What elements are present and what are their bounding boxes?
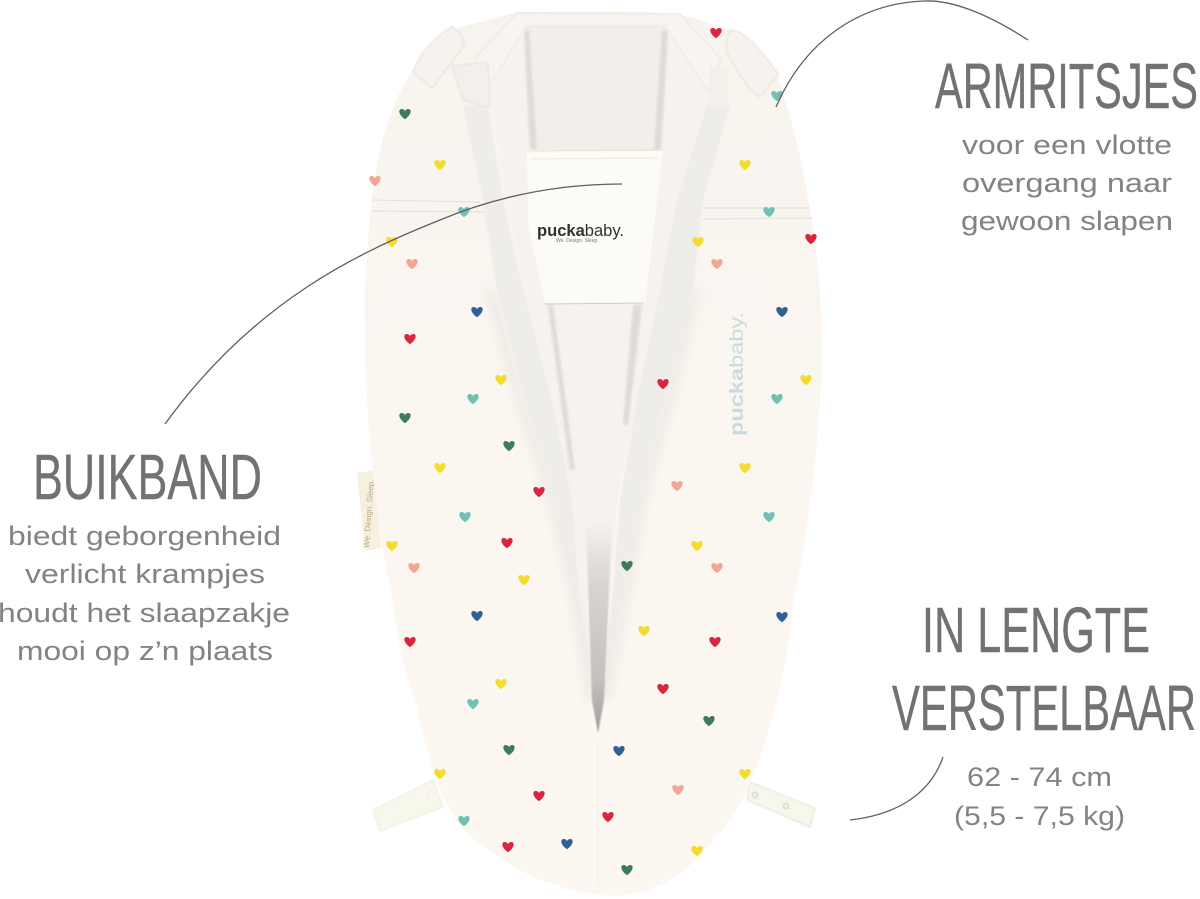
text: armritsjes: overgang naar <box>962 168 1172 198</box>
logo: vertical puckababy: puckababy. <box>727 312 748 436</box>
logo tagline: We. Design. Sleep. <box>556 238 599 244</box>
text: maten: (5,5 - 7,5 kg) <box>954 801 1125 831</box>
tag: side label <box>357 470 381 551</box>
callout line: buikband <box>165 184 622 424</box>
heading: in lengte verstelbaar <box>892 594 1196 744</box>
logo: puckababy: puckababy. <box>537 221 624 240</box>
inner back panel <box>490 26 707 733</box>
strap: left <box>373 780 443 831</box>
zipper shadow <box>490 290 695 700</box>
text: buikband: verlicht krampjes <box>25 559 265 589</box>
strap: right <box>747 782 815 827</box>
zipper: left <box>463 105 598 733</box>
text: buikband <box>0 521 290 666</box>
text: buikband: mooi op z’n plaats <box>17 636 273 666</box>
text: buikband: biedt geborgenheid <box>8 521 281 551</box>
callout: buikband <box>0 441 290 666</box>
tag: side label: We. Design. Sleep. <box>362 479 376 548</box>
text: armritsjes: gewoon slapen <box>961 206 1173 236</box>
text: buikband: houdt het slaapzakje <box>0 598 290 628</box>
zipper: right <box>598 105 730 733</box>
inner shadows <box>524 30 668 470</box>
text: maten: 62 - 74 cm <box>967 762 1112 792</box>
garment body <box>365 12 822 896</box>
arm cuff: left <box>413 27 464 88</box>
arm cuff: right <box>726 30 778 97</box>
belly band <box>527 150 663 304</box>
callout line: lengte <box>850 757 943 820</box>
heading: buikband: BUIKBAND <box>33 441 262 513</box>
illustration: sleeping bag <box>357 12 822 896</box>
text: maten <box>954 762 1125 831</box>
collar <box>452 13 728 108</box>
text: armritsjes: voor een vlotte <box>962 130 1172 160</box>
callout: lengte <box>892 594 1196 831</box>
hearts: pattern <box>369 28 817 875</box>
callout: armritsjes <box>935 50 1198 236</box>
zipper tip shadow <box>586 520 612 733</box>
side seam: left <box>372 200 485 212</box>
callout line: armritsjes <box>776 1 1028 107</box>
center seam <box>597 740 599 885</box>
neck panel <box>527 26 665 150</box>
text: armritsjes <box>961 130 1173 236</box>
side seam: right <box>702 208 812 219</box>
